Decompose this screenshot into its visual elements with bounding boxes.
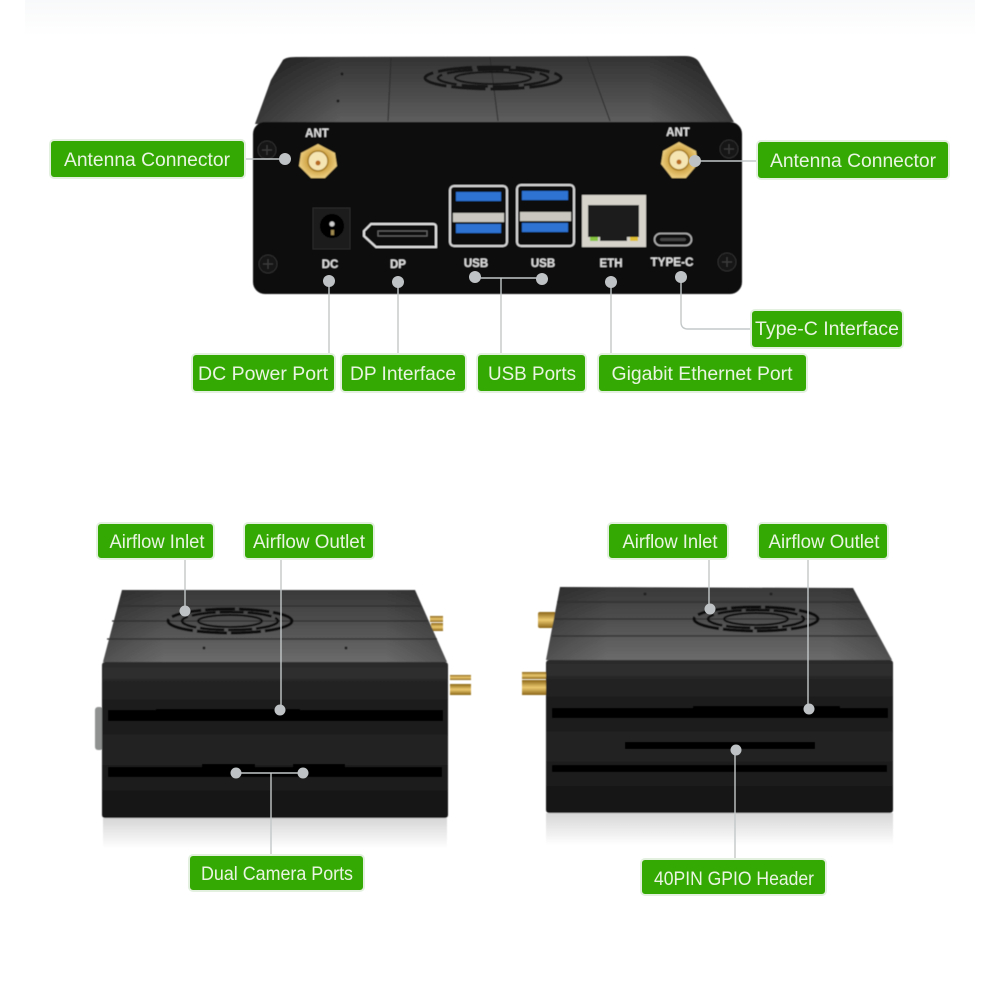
front face (253, 122, 742, 294)
side connector (95, 707, 103, 750)
label: Airflow Inlet right: Airflow Inlet (622, 532, 718, 553)
label: Airflow Outlet left: Airflow Outlet (253, 532, 366, 553)
label: 40PIN GPIO Header: 40PIN GPIO Header (654, 869, 815, 890)
label: USB Ports (477, 354, 586, 392)
ribbing (103, 667, 447, 679)
label: Antenna Connector right: Antenna Connector (770, 151, 937, 172)
port labels: TYPE-C (650, 257, 694, 269)
label: Airflow Outlet right: Airflow Outlet (768, 532, 880, 553)
port labels (305, 127, 694, 271)
top background band (25, 0, 975, 36)
front body (546, 660, 893, 813)
USB stack 2 (517, 185, 574, 246)
label: DC Power Port: DC Power Port (198, 364, 329, 385)
label: Type-C Interface (751, 310, 903, 348)
GPIO slot (625, 742, 815, 749)
rear antennas (430, 616, 471, 695)
fan grille (425, 67, 561, 89)
label: Airflow Inlet left (97, 523, 214, 559)
label: DP Interface (341, 354, 466, 392)
DC jack (313, 208, 350, 249)
port labels: USB (464, 258, 488, 270)
upper slot (108, 709, 443, 721)
top face edge shading (546, 587, 892, 660)
label: USB Ports: USB Ports (488, 364, 576, 385)
lower slot (552, 765, 887, 772)
fan grille (168, 609, 292, 633)
Ethernet port (582, 195, 646, 247)
callout leaders and dots: right side view (704, 559, 814, 859)
label: Antenna Connector left: Antenna Connector (64, 150, 231, 171)
label: 40PIN GPIO Header (641, 859, 826, 895)
device: rear view (253, 56, 742, 294)
ribbing (547, 664, 892, 676)
top face edge shading (255, 56, 734, 124)
callout leaders and dots: rear view (245, 153, 757, 354)
top screw holes (336, 72, 344, 102)
top screw holes (202, 646, 348, 650)
label: Airflow Inlet left: Airflow Inlet (110, 532, 205, 553)
label: Airflow Inlet right (608, 523, 728, 559)
label: DC Power Port (192, 354, 335, 392)
top screw holes (644, 592, 772, 596)
top face seams (107, 606, 437, 639)
top face (546, 587, 892, 660)
right antenna connector (661, 142, 698, 178)
top face (103, 590, 447, 662)
left antenna connector (299, 144, 337, 178)
label: Antenna Connector right (757, 141, 949, 179)
mounting screws (258, 140, 738, 273)
Type-C port (654, 234, 692, 246)
label: Antenna Connector left (50, 140, 245, 178)
port labels: ANT (305, 128, 329, 140)
DisplayPort (364, 224, 436, 247)
label: Type-C Interface: Type-C Interface (755, 319, 899, 340)
port labels: ETH (600, 258, 622, 270)
port labels: DP (390, 259, 406, 271)
label: Airflow Outlet left (244, 523, 374, 559)
device: right side view (522, 587, 893, 845)
reflection (546, 813, 893, 845)
top face edge shading (103, 590, 447, 662)
lower slot (108, 764, 442, 777)
port labels: ANT (666, 127, 690, 139)
label: Dual Camera Ports (189, 855, 364, 891)
label: Gigabit Ethernet Port: Gigabit Ethernet Port (612, 364, 793, 385)
USB stack 1 (450, 186, 507, 246)
fan grille (694, 607, 818, 631)
reflection (103, 818, 447, 848)
port labels: USB (531, 258, 555, 270)
callout leaders and dots: left side view (180, 559, 308, 855)
port labels: DC (322, 259, 338, 271)
label: Dual Camera Ports: Dual Camera Ports (201, 864, 353, 885)
label: Airflow Outlet right (758, 523, 888, 559)
upper slot (552, 706, 888, 718)
label: Gigabit Ethernet Port (598, 354, 807, 392)
top face (255, 56, 734, 124)
top face seams (388, 57, 610, 121)
rear antennas (522, 612, 556, 695)
label: DP Interface: DP Interface (350, 364, 456, 385)
front body (102, 662, 448, 818)
device: left side view (95, 590, 471, 848)
top face seams (552, 602, 877, 636)
